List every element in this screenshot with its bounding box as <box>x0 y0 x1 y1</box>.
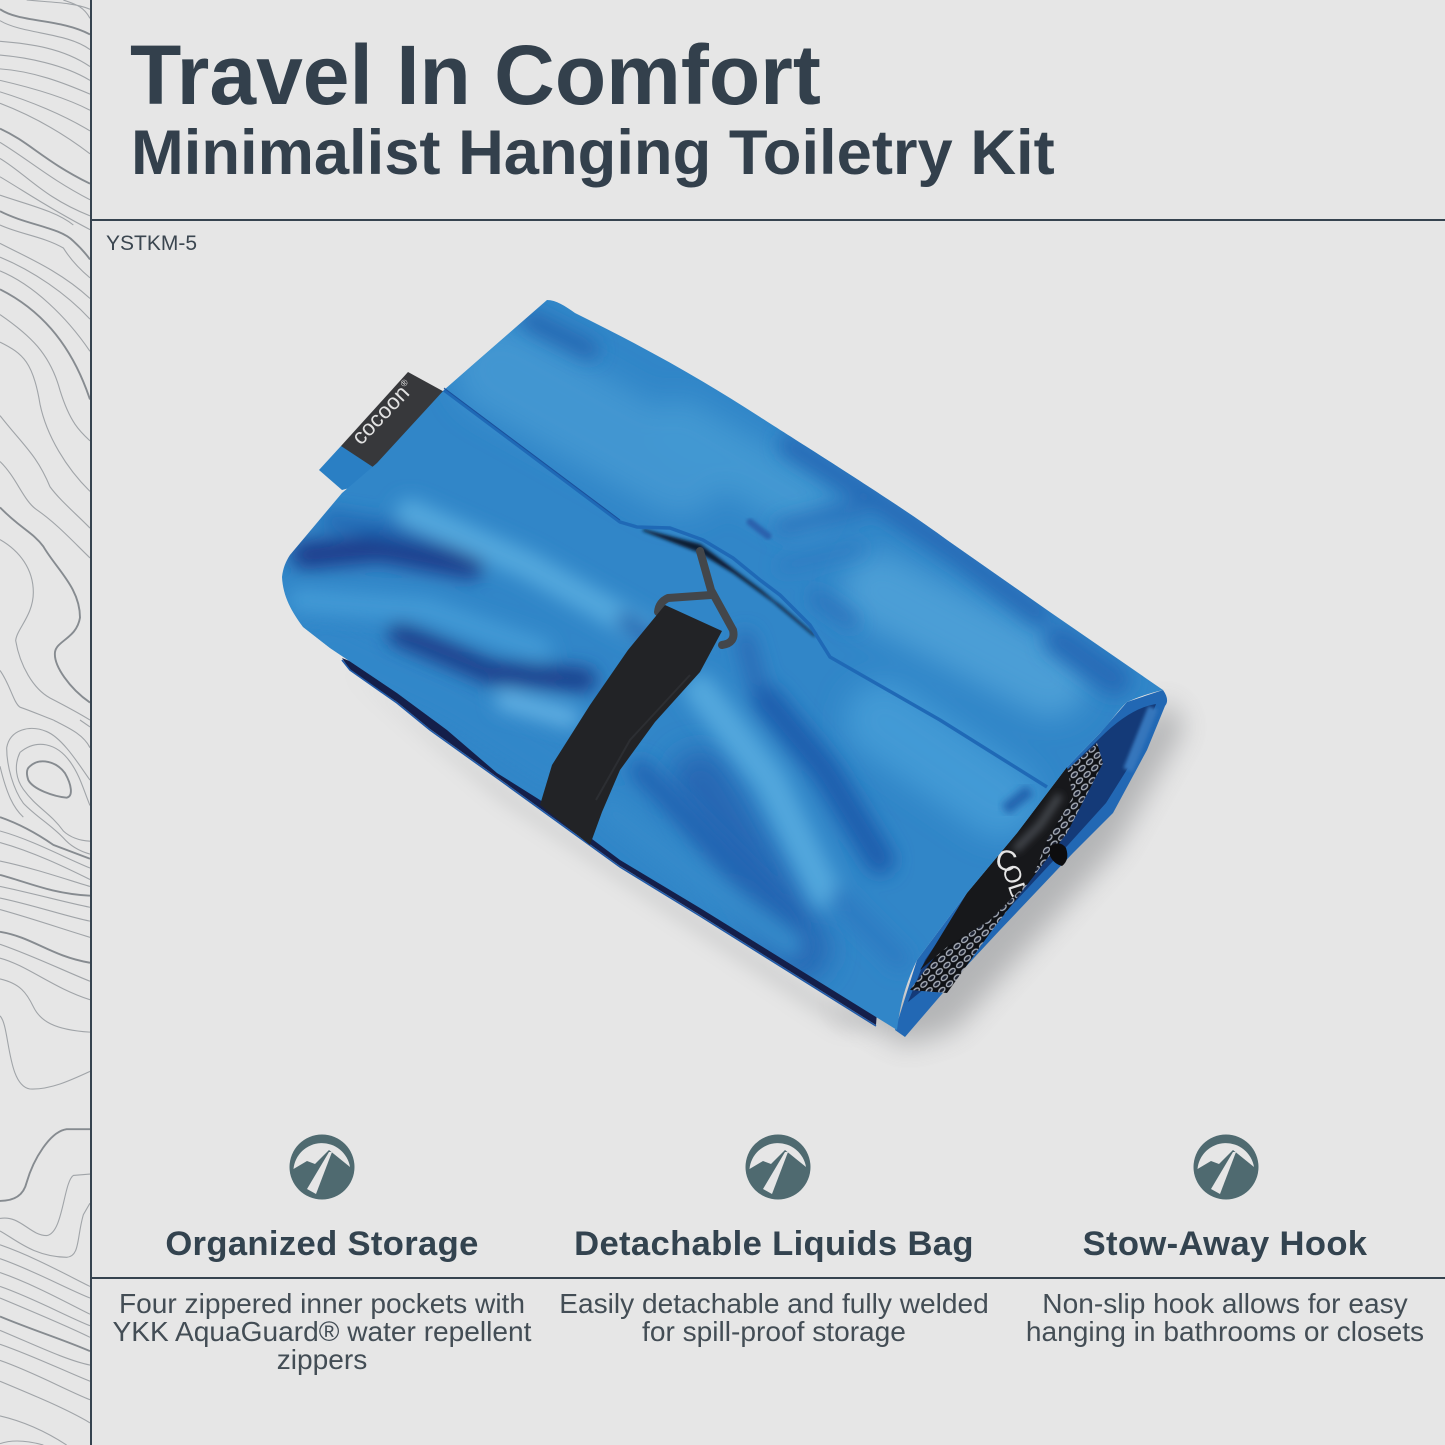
flap seam and opening <box>444 388 1047 787</box>
product code: YSTKM-5 <box>106 232 197 255</box>
heading: Organized Storage <box>165 1225 479 1263</box>
icon: mountain badge <box>1194 1134 1258 1200</box>
mesh pocket <box>910 743 1103 993</box>
drop shadow <box>345 668 1185 1045</box>
inner lining of open end <box>895 690 1167 1037</box>
inner lining of open end: C <box>993 844 1020 879</box>
description: Non-slip hook allows for easy <box>1042 1288 1408 1319</box>
heading: Stow-Away Hook <box>1083 1225 1367 1263</box>
black liquids bag film <box>920 767 1073 970</box>
inner lining of open end: OD <box>996 862 1033 904</box>
feature: detachable liquids bag <box>559 1134 989 1347</box>
drawstring toggle <box>1050 843 1067 866</box>
description: hanging in bathrooms or closets <box>1026 1316 1424 1347</box>
description: Easily detachable and fully welded <box>559 1288 989 1319</box>
underside lip <box>342 658 877 1026</box>
description <box>1026 1288 1424 1347</box>
back tab with label: ® <box>398 377 410 389</box>
heading: Detachable Liquids Bag <box>574 1225 974 1263</box>
feature: organized storage <box>113 1134 532 1375</box>
subtitle: Minimalist Hanging Toiletry Kit <box>131 118 1055 188</box>
title: Travel In Comfort <box>130 28 821 122</box>
back tab with label: cocoon <box>346 380 414 449</box>
broad tonal zones <box>320 370 1050 950</box>
description: Four zippered inner pockets with <box>119 1288 525 1319</box>
description <box>559 1288 989 1347</box>
back tab with label <box>319 372 450 490</box>
description: YKK AquaGuard® water repellent <box>113 1316 531 1347</box>
main blue fabric body <box>270 290 1180 1050</box>
velcro strap <box>540 605 722 845</box>
feature: stow-away hook <box>1026 1134 1424 1347</box>
description: for spill-proof storage <box>642 1316 906 1347</box>
topographic contour strip <box>0 0 90 1445</box>
description <box>113 1288 532 1375</box>
icon: mountain badge <box>746 1134 810 1200</box>
description: zippers <box>277 1344 367 1375</box>
fabric sheen <box>300 320 1115 960</box>
hook <box>658 551 734 645</box>
icon: mountain badge <box>290 1134 354 1200</box>
product photo: blue hanging toiletry kit <box>282 300 1192 1055</box>
